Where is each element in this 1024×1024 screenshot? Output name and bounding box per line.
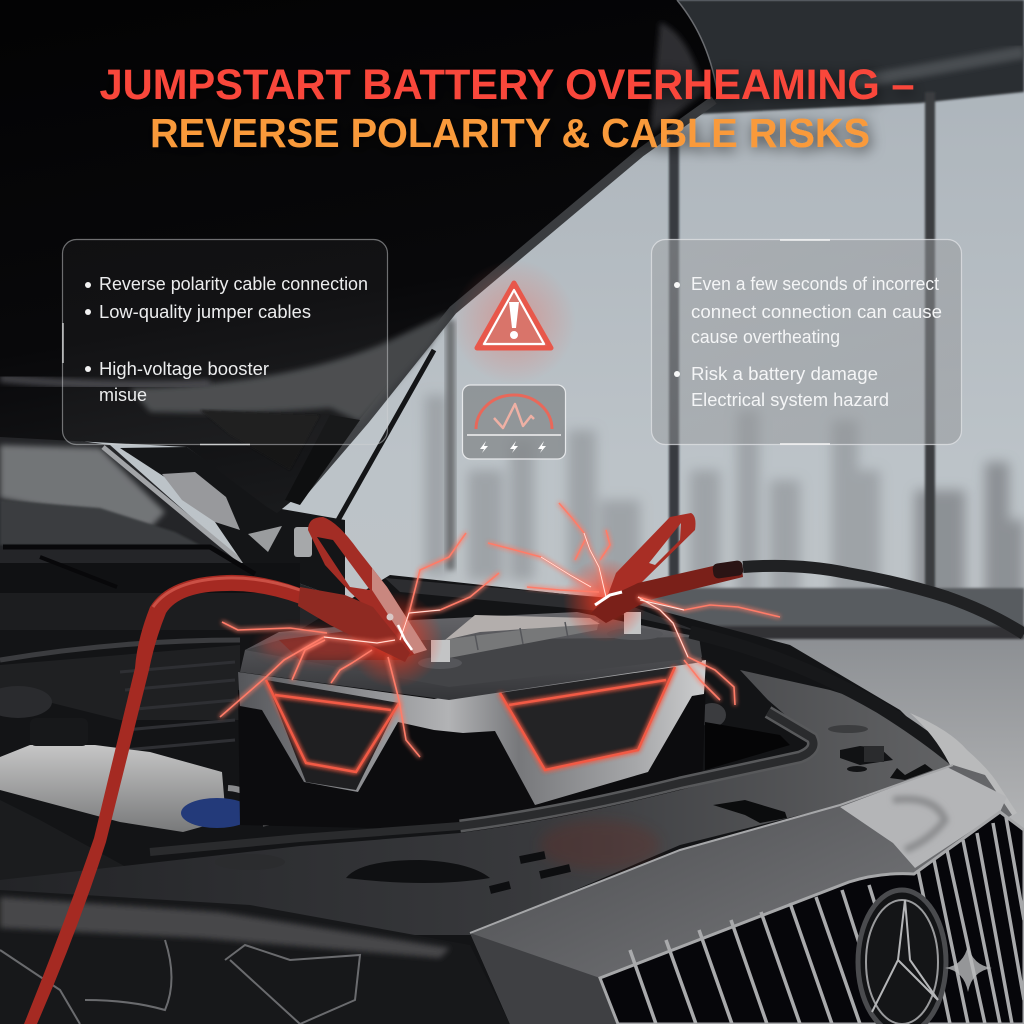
background: blurred city skyline <box>425 395 1024 602</box>
title <box>100 61 914 156</box>
terminal posts <box>418 612 663 669</box>
open car hood <box>0 0 718 557</box>
coolant reservoir <box>0 718 266 880</box>
windshield and cowl <box>0 430 345 640</box>
glow around clamps <box>260 558 647 688</box>
electric sparks <box>220 503 780 757</box>
black jumper cable <box>743 566 1024 634</box>
car emblem <box>858 890 946 1024</box>
icon: voltage gauge <box>462 385 566 459</box>
red jumper cable <box>24 575 300 1024</box>
battery lower black body <box>238 680 706 835</box>
risks list: Risk a battery damage <box>691 364 878 384</box>
risks list: cause overtheating <box>691 327 840 347</box>
panel: risks <box>652 240 962 444</box>
causes list: Low-quality jumper cables <box>99 302 311 322</box>
raised lid section <box>441 620 599 658</box>
causes list: High-voltage booster <box>99 359 269 379</box>
causes list: Reverse polarity cable connection <box>99 274 368 294</box>
window mullions <box>446 92 935 622</box>
battery lid <box>240 612 702 700</box>
car front panel <box>470 765 1012 1024</box>
hood strut <box>337 350 434 522</box>
icon: warning triangle <box>452 260 576 384</box>
battery silver band <box>238 660 706 805</box>
risks list <box>674 274 942 410</box>
window base wall <box>620 588 1024 639</box>
causes list: misue <box>99 385 147 405</box>
risks list: Even a few seconds of incorrect <box>691 274 939 294</box>
fender top surface <box>0 670 955 935</box>
right red clamp <box>591 513 744 623</box>
risks list: connect connection can cause <box>691 302 942 322</box>
left battery panel <box>266 680 399 790</box>
car battery <box>238 612 706 835</box>
lower hood strip and headlight <box>0 890 510 1024</box>
engine bay <box>0 575 1024 1024</box>
panel: causes <box>62 240 388 444</box>
right battery panel <box>500 667 675 770</box>
left red clamp <box>298 517 427 662</box>
far fender edge <box>910 713 1017 818</box>
title: REVERSE POLARITY & CABLE RISKS <box>150 110 870 156</box>
radiator grille <box>600 812 1024 1024</box>
title: JUMPSTART BATTERY OVERHEAMING – <box>100 61 914 109</box>
far hood ledge <box>690 632 957 762</box>
spark white core <box>324 533 688 657</box>
causes list <box>85 274 368 405</box>
watermark sparkle <box>945 945 992 992</box>
risks list: Electrical system hazard <box>691 390 889 410</box>
